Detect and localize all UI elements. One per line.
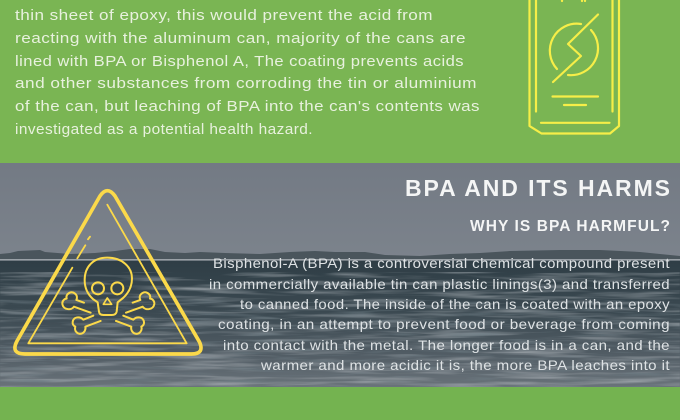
text block: BPA description: coating, in an attempt to prevent food or beverage from coming [218,316,670,332]
text block: epoxy lining explanation: and other substances from corroding the tin or aluminium [15,76,477,92]
text block: BPA description: to canned food. The inside of the can is coated with an epoxy [240,296,670,312]
text block: epoxy lining explanation: thin sheet of epoxy, this would prevent the acid from [15,8,433,24]
photo background: sky, shoreline and sea [0,163,680,387]
text block: BPA description: in commercially available tin can plastic linings(3) and transferred [209,276,670,292]
text block: epoxy lining explanation: reacting with the aluminum can, majority of the cans are [15,31,466,47]
panel: top green section [0,0,680,164]
text block: BPA description [209,255,670,373]
text block: epoxy lining explanation: investigated as a potential health hazard. [15,122,313,138]
icon: skull and crossbones warning triangle [15,191,201,354]
heading: BPA and its harms: BPA AND ITS HARMS [405,175,670,201]
text block: BPA description: Bisphenol-A (BPA) is a controversial chemical compound present [213,255,670,271]
text block: BPA description: warmer and more acidic it is, the more BPA leaches into it [260,357,670,373]
panel: BPA and its harms photo section [0,163,680,387]
subheading: why is BPA harmful: WHY IS BPA HARMFUL? [470,218,670,235]
icon: energy drink can with lightning bolt [530,0,619,134]
text block: epoxy lining explanation: of the can, but leaching of BPA into the can's contents was [15,99,480,115]
panel: bottom green band [0,387,680,420]
text block: epoxy lining explanation [15,8,480,138]
text block: epoxy lining explanation: lined with BPA or Bisphenol A, The coating prevents acids [15,54,464,70]
text block: BPA description: into contact with the metal. The longer food is in a can, and the [223,337,670,353]
